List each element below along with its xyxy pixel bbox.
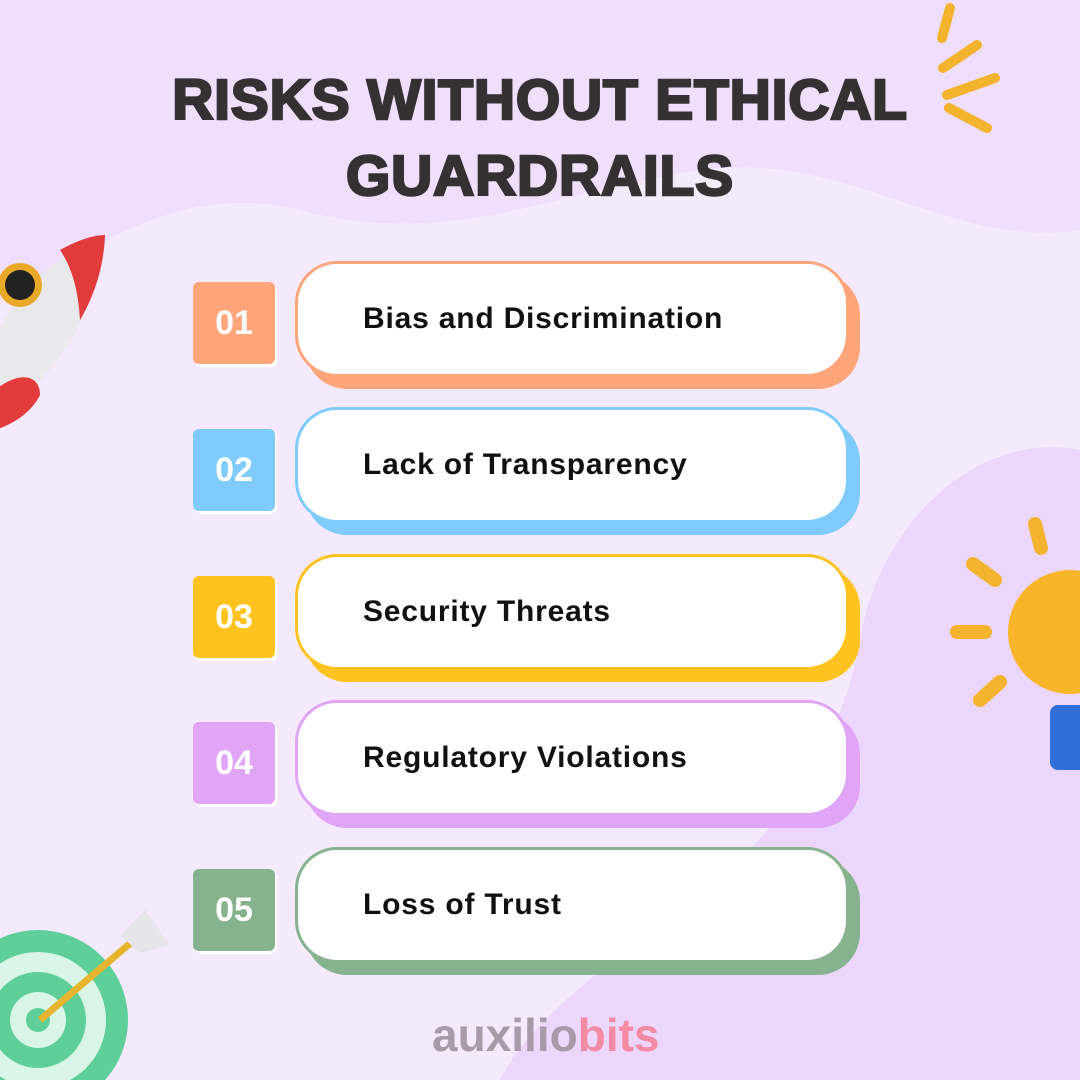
number badge 05 <box>193 869 275 951</box>
number badge 01 <box>193 282 275 364</box>
item 2 <box>193 407 860 535</box>
card: Bias and Discrimination <box>295 261 860 389</box>
icon: target <box>0 910 170 1080</box>
card: Security Threats <box>295 554 860 682</box>
card: Security Threats: Security Threats <box>363 595 611 628</box>
number badge 05: 05 <box>215 890 253 928</box>
card: Loss of Trust: Loss of Trust <box>363 888 562 921</box>
logo: auxiliobits <box>432 1009 660 1061</box>
number badge 04 <box>193 722 275 804</box>
card: Bias and Discrimination: Bias and Discrimination <box>363 302 723 335</box>
item 1 <box>193 261 860 389</box>
card: Lack of Transparency: Lack of Transparency <box>363 448 687 481</box>
number badge 02 <box>193 429 275 511</box>
icon: rocket <box>0 235 105 428</box>
title <box>172 68 908 208</box>
title: RISKS WITHOUT ETHICAL <box>172 68 908 132</box>
card: Lack of Transparency <box>295 407 860 535</box>
number badge 03: 03 <box>215 598 253 636</box>
icon: sparkle rays <box>937 3 1000 133</box>
item 3 <box>193 554 860 682</box>
card: Regulatory Violations <box>295 700 860 828</box>
icon: lightbulb <box>950 517 1080 770</box>
card: Loss of Trust <box>295 847 860 975</box>
number badge 03 <box>193 576 275 658</box>
number badge 01: 01 <box>215 304 253 342</box>
item 5 <box>193 847 860 975</box>
number badge 02: 02 <box>215 450 253 488</box>
item 4 <box>193 700 860 828</box>
title: GUARDRAILS <box>346 144 734 208</box>
number badge 04: 04 <box>215 744 253 782</box>
card: Regulatory Violations: Regulatory Violations <box>363 741 688 774</box>
